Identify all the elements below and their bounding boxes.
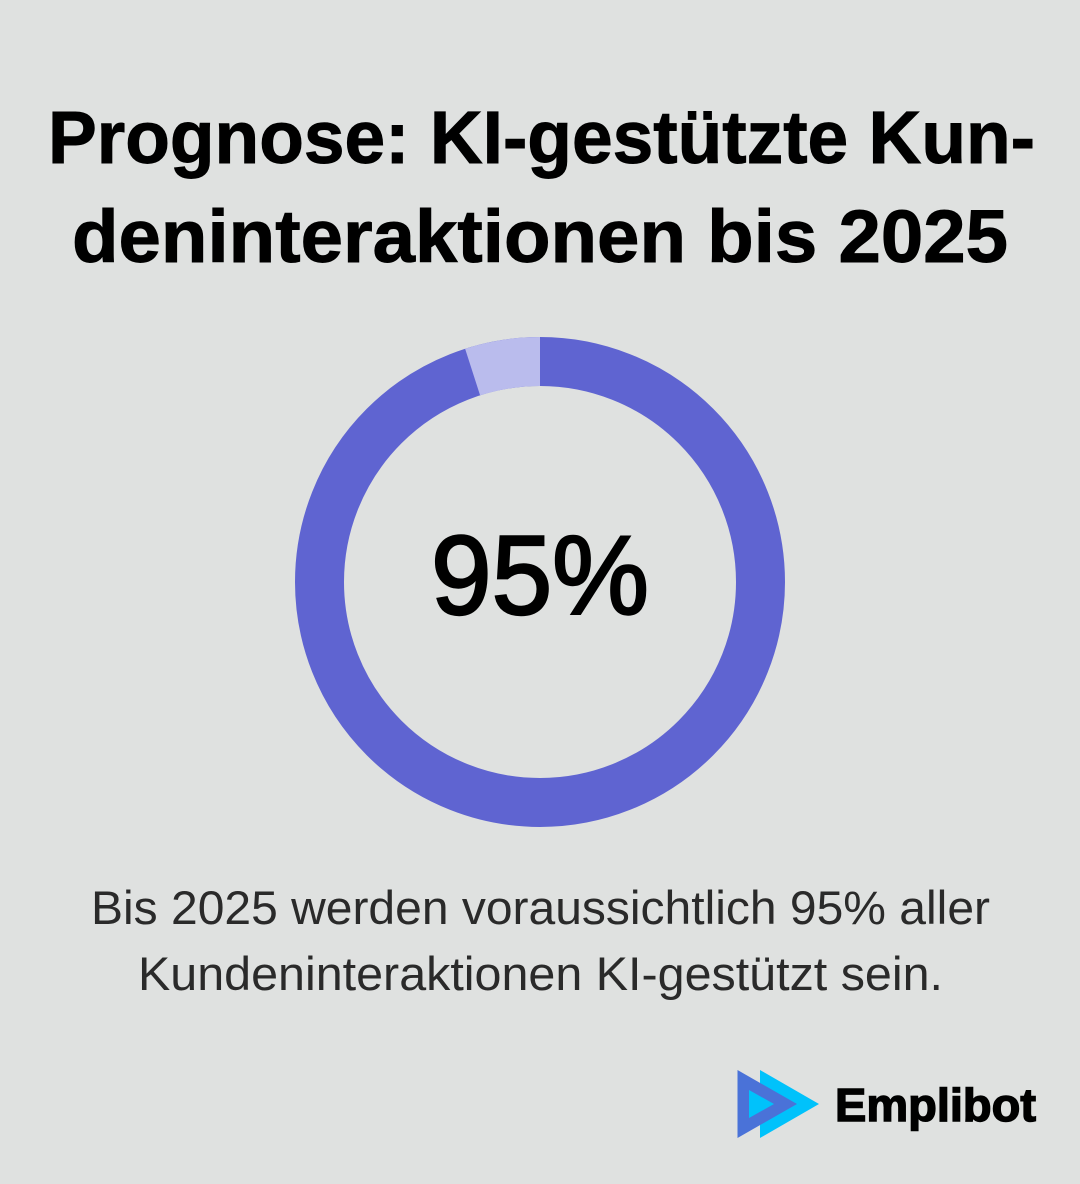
description text: Bis 2025 werden voraussichtlich 95% aller [91,881,990,934]
description text [91,881,990,1000]
title: Prognose: KI-gestützte Kun- [48,96,1035,179]
donut chart: 95 percent [320,337,760,802]
title [48,96,1035,278]
icon: play triangles [738,1070,819,1138]
brand name: Emplibot [835,1079,1036,1131]
donut remainder segment [465,337,540,395]
title: deninteraktionen bis 2025 [72,195,1008,278]
donut base segment [320,362,760,802]
description text: Kundeninteraktionen KI-gestützt sein. [138,947,943,1000]
donut value label: 95% [431,513,649,638]
brand logo [738,1070,1036,1138]
